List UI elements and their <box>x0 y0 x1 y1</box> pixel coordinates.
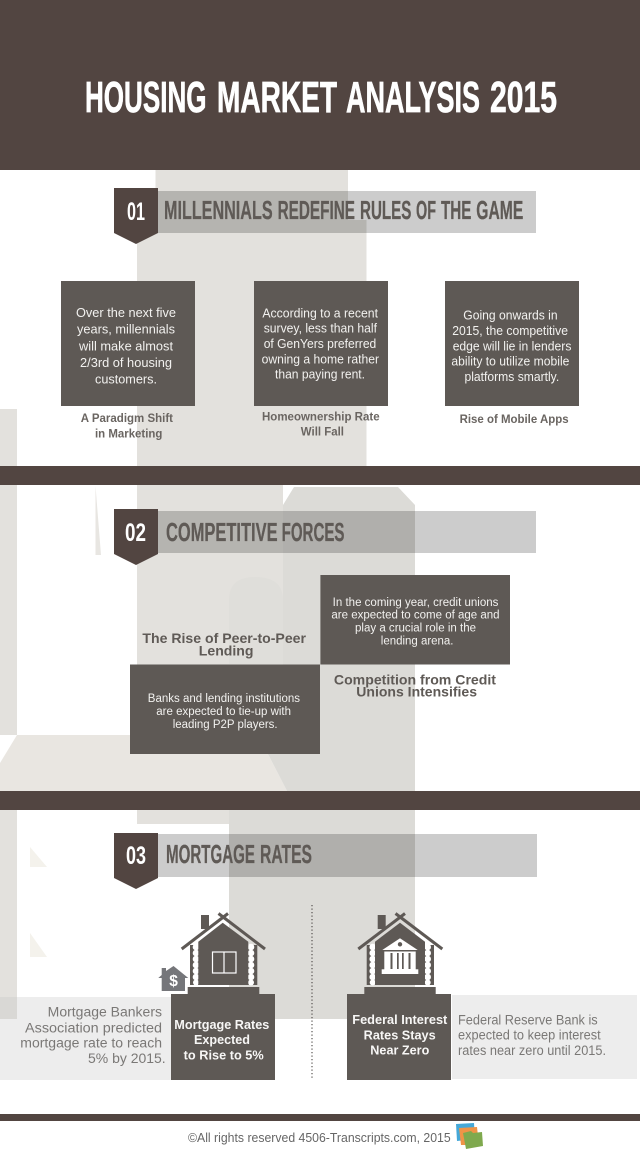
panel: millennials card 1: years, millennials <box>77 323 175 337</box>
panel: peer-to-peer text: are expected to tie-up with <box>156 706 291 718</box>
panel: federal reserve text: rates near zero until 2015. <box>458 1043 606 1058</box>
number 03: 03 <box>126 842 146 870</box>
title: 2015 <box>490 73 557 122</box>
panel: millennials card 3: 2015, the competitive <box>452 324 568 338</box>
heading ribbon 3 <box>155 834 537 877</box>
panel: mortgage rates label: to Rise to 5% <box>184 1048 264 1062</box>
heading text 1: GAME <box>476 195 523 225</box>
caption: homeownership rate: Will Fall <box>301 425 344 439</box>
number badge 01 <box>114 188 158 244</box>
panel: millennials card 2: of GenYers preferred <box>264 337 376 351</box>
panel: mortgage bankers text: Mortgage Bankers <box>48 1005 162 1020</box>
panel: millennials card 2: than paying rent. <box>275 368 365 382</box>
panel: millennials card 1 <box>61 281 195 406</box>
panel: federal interest label: Federal Interest <box>352 1013 448 1027</box>
section divider bar 2 <box>0 791 640 810</box>
header banner <box>0 0 640 170</box>
panel: millennials card 3 <box>445 281 579 406</box>
panel: millennials card 2: survey, less than half <box>264 322 378 336</box>
panel: credit unions text: In the coming year, credit unions <box>333 597 499 609</box>
caption: mobile apps: Rise of Mobile Apps <box>460 412 569 426</box>
panel: millennials card 2: According to a recent <box>262 306 379 320</box>
heading: peer-to-peer: The Rise of Peer-to-Peer <box>142 630 307 646</box>
panel: mortgage rates label: Mortgage Rates <box>174 1018 269 1032</box>
panel: mortgage rates label: Expected <box>194 1033 250 1047</box>
panel: federal interest label: Near Zero <box>370 1044 430 1058</box>
caption: homeownership rate <box>262 409 380 439</box>
number badge 02 <box>114 509 158 565</box>
panel: millennials card 1: will make almost <box>78 339 174 353</box>
heading: peer-to-peer <box>142 630 307 658</box>
heading text 1: REDEFINE <box>278 195 355 225</box>
panel: millennials card 2 <box>254 281 388 406</box>
heading text 1: OF <box>416 195 436 225</box>
heading text 3: MORTGAGE <box>166 839 255 869</box>
heading: credit unions: Competition from Credit <box>334 671 496 687</box>
icon: log house with bank <box>358 914 442 986</box>
panel: federal interest label: Rates Stays <box>364 1028 436 1042</box>
heading: credit unions: Unions Intensifies <box>356 683 477 699</box>
heading text 3: RATES <box>260 839 312 869</box>
icon: small house with dollar sign: $ <box>169 973 178 990</box>
panel: peer-to-peer text <box>130 664 320 754</box>
heading ribbon 1 <box>155 191 536 233</box>
heading: peer-to-peer: Lending <box>199 642 254 658</box>
section 3 heading <box>114 833 537 889</box>
title <box>85 73 557 122</box>
section divider bar 1 <box>0 466 640 485</box>
heading text 1 <box>164 195 523 225</box>
footer copyright: ©All rights reserved 4506-Transcripts.com, 2015 <box>188 1131 451 1145</box>
panel: mortgage rates label <box>171 987 275 1080</box>
icon: log house with window <box>182 914 265 986</box>
panel: millennials card 1: 2/3rd of housing <box>80 356 172 370</box>
title: MARKET <box>217 73 337 122</box>
number 02: 02 <box>125 519 146 547</box>
heading text 2: COMPETITIVE <box>166 517 278 547</box>
number 01: 01 <box>127 198 145 226</box>
title: ANALYSIS <box>346 73 480 122</box>
caption: homeownership rate: Homeownership Rate <box>262 409 380 423</box>
panel: millennials card 2: owning a home rather <box>262 352 379 366</box>
heading: credit unions <box>334 671 496 699</box>
panel: millennials card 1: customers. <box>95 373 157 387</box>
panel: millennials card 3: edge will lie in lenders <box>453 339 571 353</box>
panel: mortgage bankers text: Association predicted <box>25 1020 162 1035</box>
caption: paradigm shift <box>81 411 173 440</box>
panel: millennials card 1: Over the next five <box>76 306 176 320</box>
panel: peer-to-peer text: leading P2P players. <box>173 719 278 731</box>
panel: mortgage bankers text <box>0 997 171 1080</box>
icon: small house with dollar sign <box>158 966 188 991</box>
panel: credit unions text <box>320 575 510 664</box>
panel: federal reserve text: Federal Reserve Bank is <box>458 1012 598 1027</box>
heading text 1: RULES <box>360 195 411 225</box>
panel: federal interest label <box>347 987 451 1080</box>
caption: paradigm shift: A Paradigm Shift <box>81 411 173 425</box>
panel: millennials card 3: ability to utilize mobile <box>451 355 569 369</box>
panel: federal reserve text: expected to keep interest <box>458 1028 601 1043</box>
panel: mortgage bankers text: mortgage rate to reach <box>20 1036 162 1051</box>
heading text 1: THE <box>441 195 471 225</box>
section 2 heading <box>114 509 536 565</box>
panel: millennials card 3: Going onwards in <box>463 309 558 323</box>
panel: federal reserve text <box>452 995 637 1079</box>
panel: mortgage bankers text: 5% by 2015. <box>88 1051 166 1066</box>
number badge 03 <box>114 833 158 889</box>
background building shapes <box>0 170 415 1019</box>
caption: paradigm shift: in Marketing <box>95 426 162 440</box>
heading ribbon 2 <box>155 511 536 553</box>
heading text 1: MILLENNIALS <box>164 195 273 225</box>
dotted divider <box>311 905 313 1080</box>
footer bar <box>0 1114 640 1121</box>
panel: credit unions text: play a crucial role in the <box>355 623 476 635</box>
heading text 2: FORCES <box>282 517 344 547</box>
icon: folders <box>456 1123 483 1149</box>
panel: credit unions text: are expected to come of age and <box>331 610 500 622</box>
panel: millennials card 3: platforms smartly. <box>464 370 559 384</box>
panel: peer-to-peer text: Banks and lending institutions <box>148 693 300 705</box>
section 1 heading <box>114 188 536 244</box>
panel: credit unions text: lending arena. <box>381 635 454 647</box>
title: HOUSING <box>85 73 206 122</box>
